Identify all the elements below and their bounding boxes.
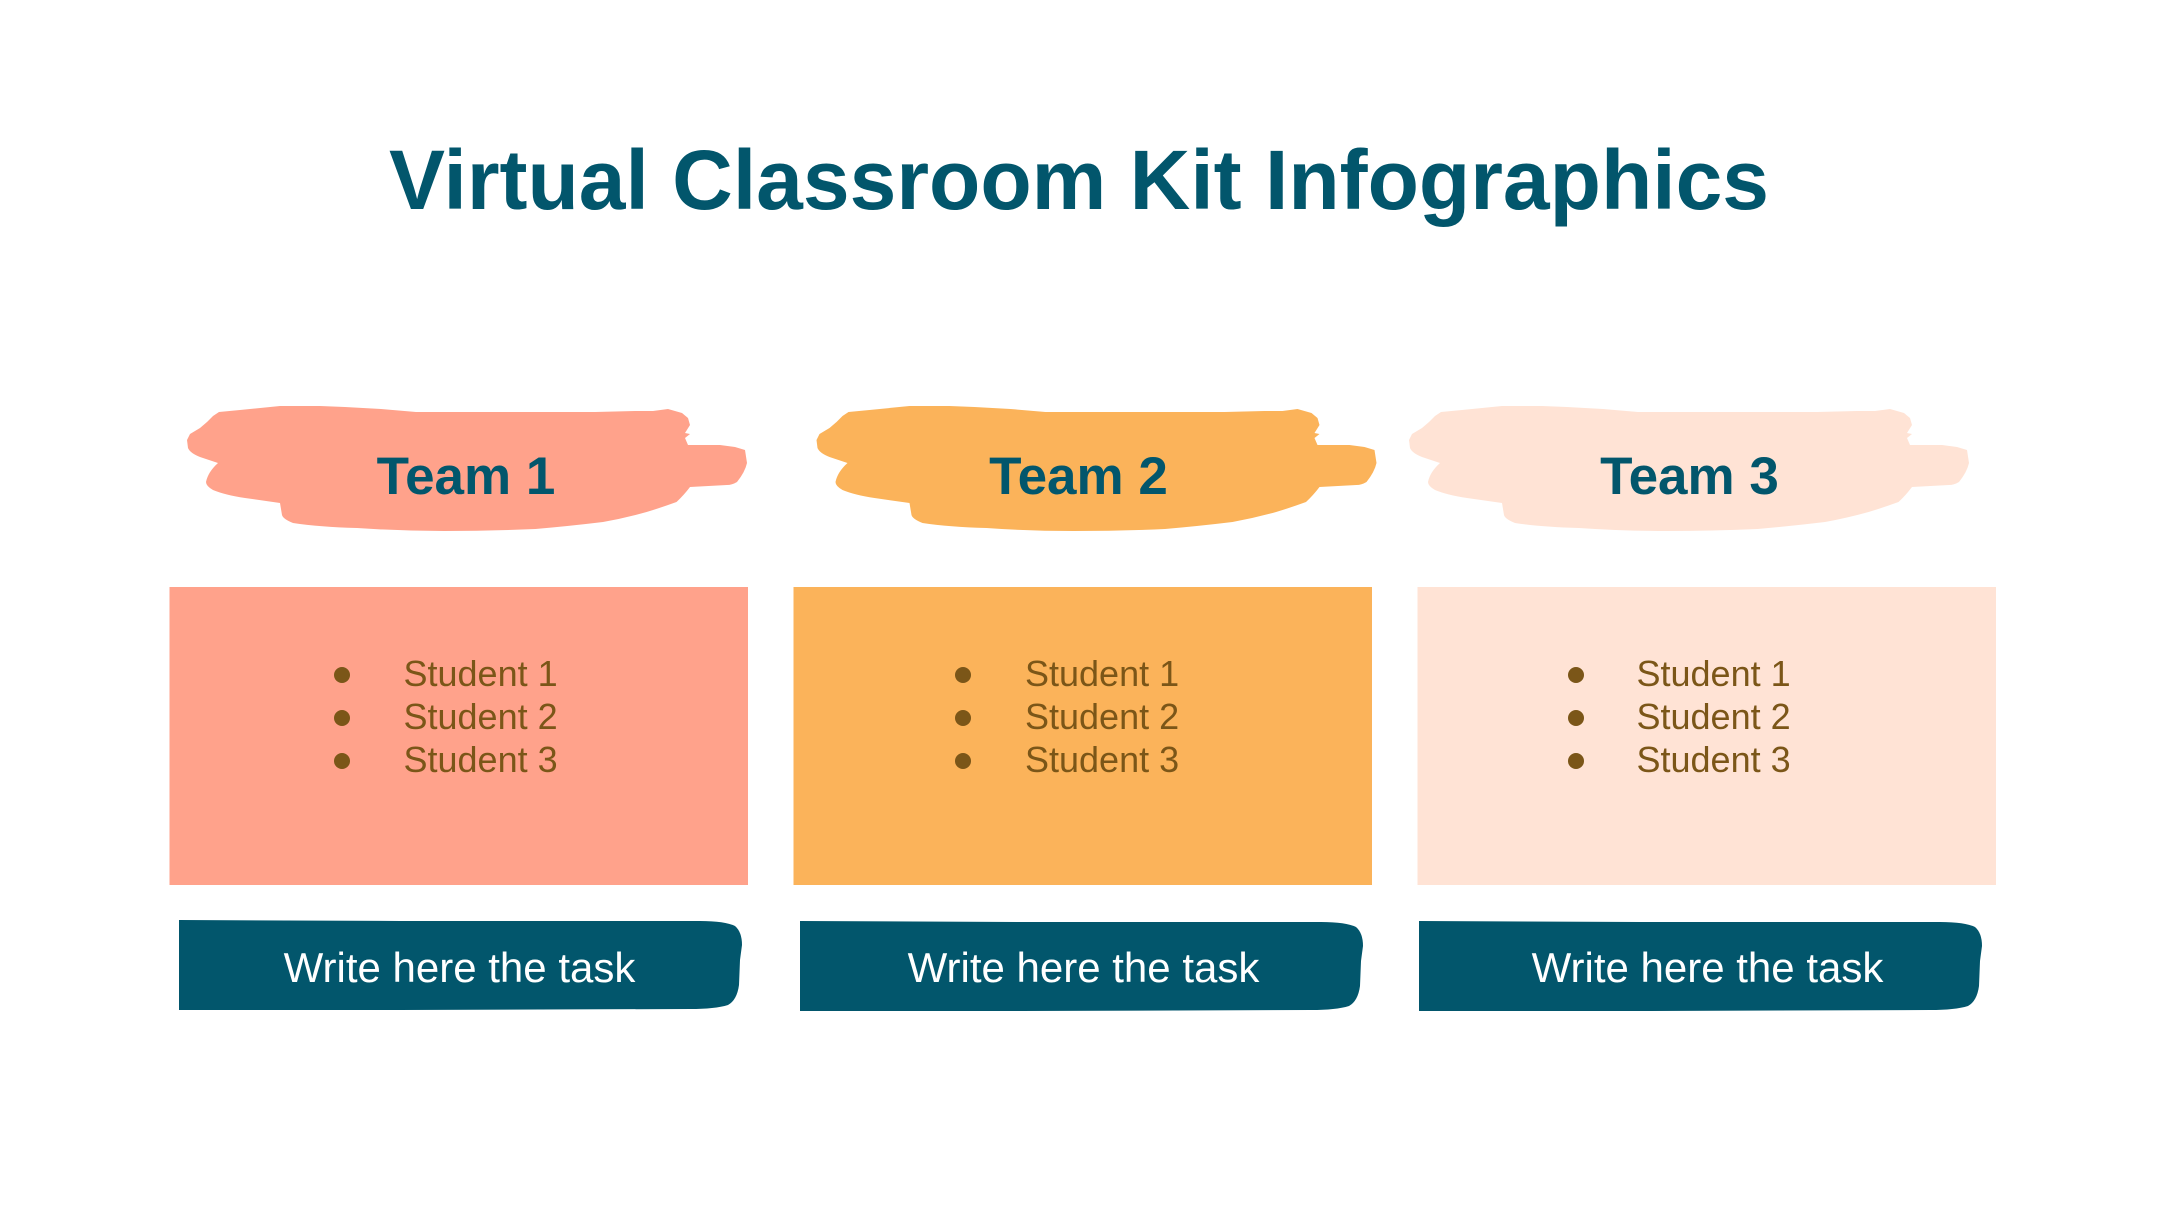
task bar: team 2 [800,921,1363,1011]
heading: team 3 brush label: Team 3 [1600,447,1779,506]
card: team 2 students [794,587,1372,885]
heading: team 2 brush label: Team 2 [989,447,1168,506]
panel: team 1 [170,406,748,1010]
heading: team 3 brush label [1409,406,1969,531]
card: team 1 students: Student 2 [404,696,558,737]
card: team 2 students: Student 3 [1025,739,1179,780]
heading: team 1 brush label: Team 1 [377,447,555,506]
card: team 1 students: Student 1 [404,653,558,694]
heading: team 2 brush label [816,406,1376,531]
card: team 2 students: Student 1 [1025,653,1179,694]
task bar: team 1 [179,920,742,1010]
title: Virtual Classroom Kit Infographics [389,133,1769,227]
heading: team 1 brush label [187,406,747,531]
card: team 3 students: Student 1 [1636,653,1791,694]
panel: team 3 [1409,406,1996,1011]
task bar: team 3: Write here the task [1532,944,1884,991]
card: team 2 students: Student 2 [1025,696,1179,737]
card: team 1 students: Student 3 [404,739,558,780]
card: team 1 students [170,587,748,885]
task bar: team 1: Write here the task [284,944,636,991]
card: team 3 students: Student 2 [1636,696,1791,737]
card: team 3 students [1418,587,1996,885]
task bar: team 3 [1419,921,1982,1011]
task bar: team 2: Write here the task [908,944,1260,991]
panel: team 2 [794,406,1376,1011]
card: team 3 students: Student 3 [1636,739,1791,780]
